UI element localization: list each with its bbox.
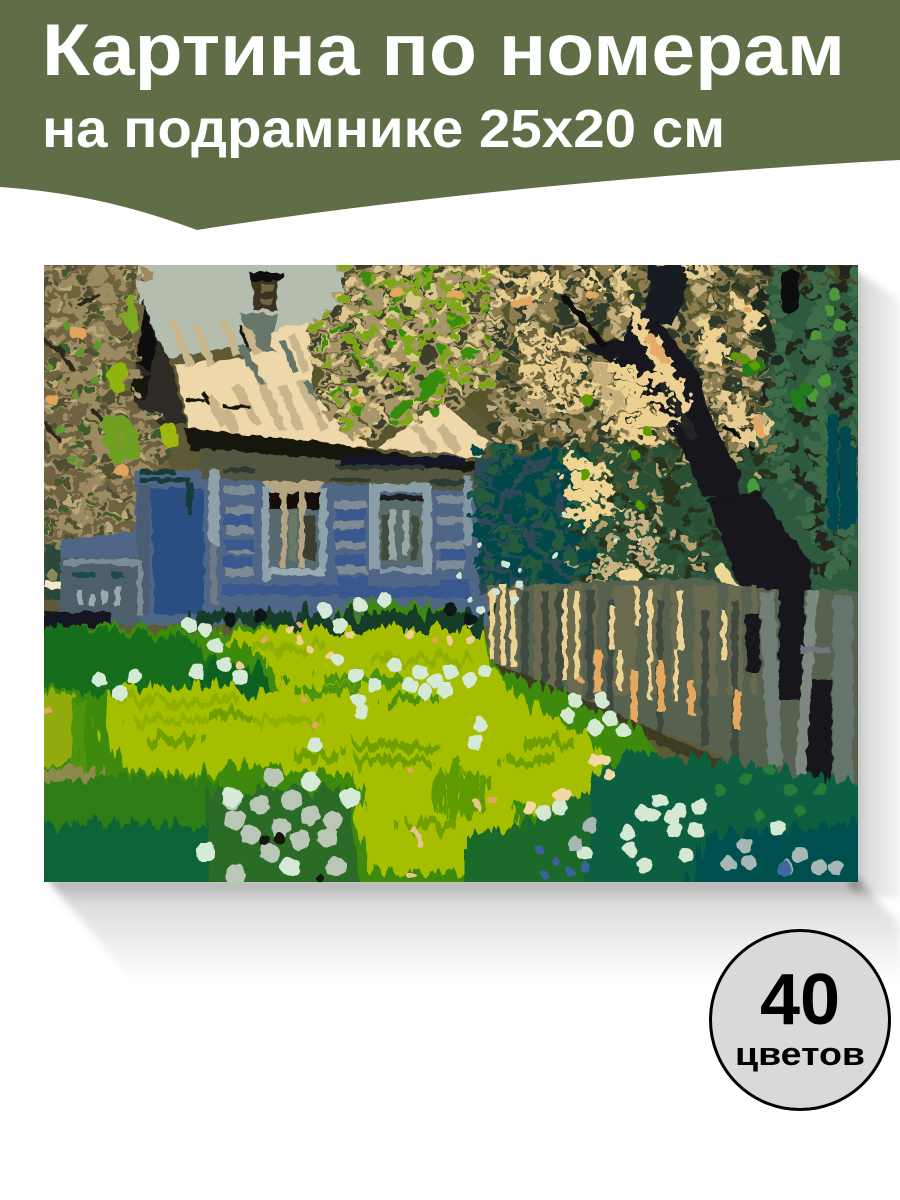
subtitle: на подрамнике 25х20 см <box>42 99 725 159</box>
window left <box>262 481 326 580</box>
blossoms <box>360 270 765 600</box>
fence <box>488 578 858 800</box>
painting: summer cottage with blossoming tree <box>44 265 858 882</box>
trunk and branches <box>561 265 812 592</box>
header banner <box>0 0 900 230</box>
left foliage <box>30 250 172 600</box>
chimney <box>238 272 285 352</box>
tree crown <box>306 265 858 600</box>
badge: 40 colours <box>710 930 890 1110</box>
badge label: цветов <box>735 1036 865 1072</box>
badge number: 40 <box>760 960 840 1040</box>
white flowers <box>99 565 835 878</box>
grass <box>44 594 858 882</box>
title: Картина по номерам <box>42 10 845 91</box>
grass accents <box>45 610 820 875</box>
sky and roof layer <box>130 265 489 458</box>
house wall <box>44 428 500 628</box>
canvas drop shadow <box>46 268 900 985</box>
window right <box>372 485 430 575</box>
